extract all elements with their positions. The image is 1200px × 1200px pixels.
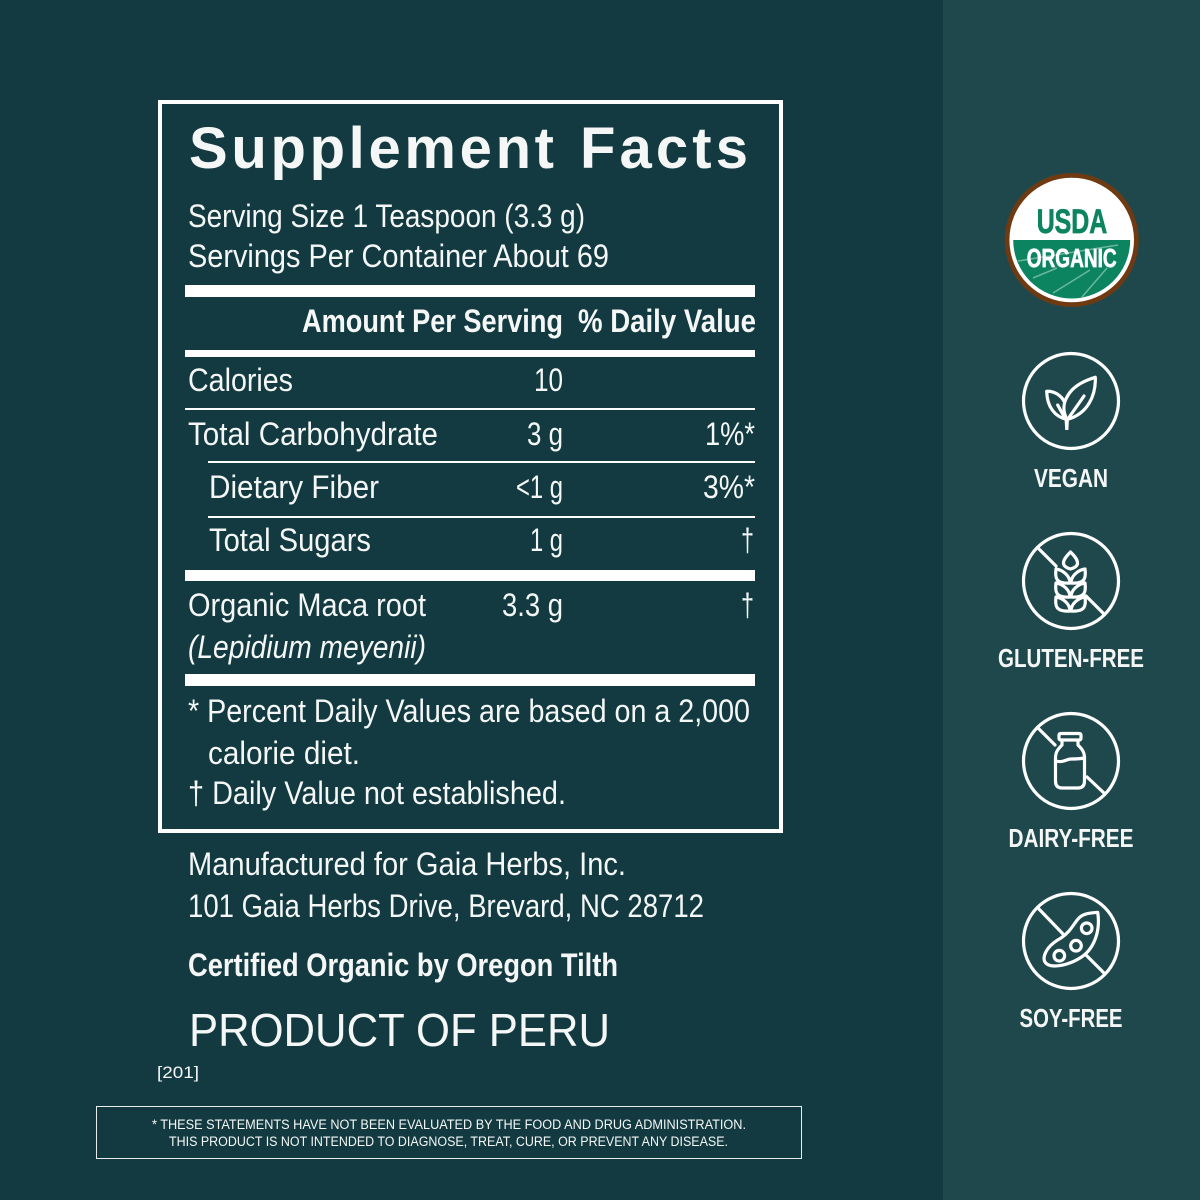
row: dietary fiber: Dietary Fiber [209, 469, 379, 505]
row: organic maca root [188, 587, 754, 665]
heading: Supplement Facts: Facts [580, 116, 748, 181]
certification: Certified Organic by Oregon Tilth [188, 947, 618, 983]
icon: vegan leaf [1024, 354, 1118, 448]
icon: gluten-free wheat [1024, 534, 1118, 628]
heading: Supplement Facts: Supplement [189, 116, 554, 181]
column headers: Amount Per Serving [302, 303, 563, 339]
disclaimer box: * THESE STATEMENTS HAVE NOT BEEN EVALUATED BY THE FOOD AND DRUG ADMINISTRATION. [152, 1117, 746, 1132]
row: total carbohydrate: 3 g [527, 416, 563, 452]
serving information [188, 198, 609, 274]
row: organic maca root: † [741, 587, 754, 623]
label: dairy-free: DAIRY-FREE [1008, 823, 1134, 853]
manufacturer address: 101 Gaia Herbs Drive, Brevard, NC 28712 [188, 888, 704, 924]
row: organic maca root: Organic Maca root [188, 587, 426, 623]
heading: Supplement Facts [189, 116, 748, 181]
icon: soy-free bean [1024, 894, 1118, 988]
disclaimer box [96, 1106, 802, 1158]
row: organic maca root: (Lepidium meyenii) [188, 629, 426, 665]
row: calories: 10 [534, 362, 563, 398]
column headers: % Daily Value [578, 303, 756, 339]
row: total sugars: 1 g [530, 522, 563, 558]
row: dietary fiber: 3%* [703, 469, 755, 505]
footnotes: † Daily Value not established. [188, 775, 566, 811]
row: calories: Calories [188, 362, 293, 398]
icon: USDA organic seal: ORGANIC [1027, 245, 1117, 273]
manufacturer address: Manufactured for Gaia Herbs, Inc. [188, 846, 626, 882]
footnotes: calorie diet. [208, 735, 360, 771]
row: total sugars: Total Sugars [209, 522, 371, 558]
manufacturer address [188, 846, 704, 924]
icon: USDA organic seal [1005, 173, 1139, 307]
row: calories [188, 362, 563, 398]
serving information: Servings Per Container About 69 [188, 238, 609, 274]
row: dietary fiber [209, 469, 755, 505]
disclaimer box: THIS PRODUCT IS NOT INTENDED TO DIAGNOSE, TREAT, CURE, OR PREVENT ANY DISEASE. [169, 1134, 728, 1149]
row: total sugars [209, 522, 754, 558]
product of peru: PRODUCT OF PERU [189, 1004, 610, 1056]
serving information: Serving Size 1 Teaspoon (3.3 g) [188, 198, 585, 234]
lot code: [201] [157, 1063, 199, 1082]
panel: supplement facts [160, 102, 781, 831]
footnotes [188, 693, 750, 811]
icon: USDA organic seal: USDA [1037, 203, 1107, 241]
row: total carbohydrate [188, 416, 755, 452]
row: total sugars: † [741, 522, 754, 558]
icon: dairy-free bottle [1024, 714, 1118, 808]
row: total carbohydrate: Total Carbohydrate [188, 416, 438, 452]
row: total carbohydrate: 1%* [705, 416, 755, 452]
label: soy-free: SOY-FREE [1020, 1003, 1122, 1033]
column headers [302, 303, 756, 339]
footnotes: * Percent Daily Values are based on a 2,000 [188, 693, 750, 729]
row: organic maca root: 3.3 g [502, 587, 563, 623]
label: gluten-free: GLUTEN-FREE [998, 643, 1144, 673]
row: dietary fiber: <1 g [516, 469, 563, 505]
label: vegan: VEGAN [1034, 463, 1108, 493]
